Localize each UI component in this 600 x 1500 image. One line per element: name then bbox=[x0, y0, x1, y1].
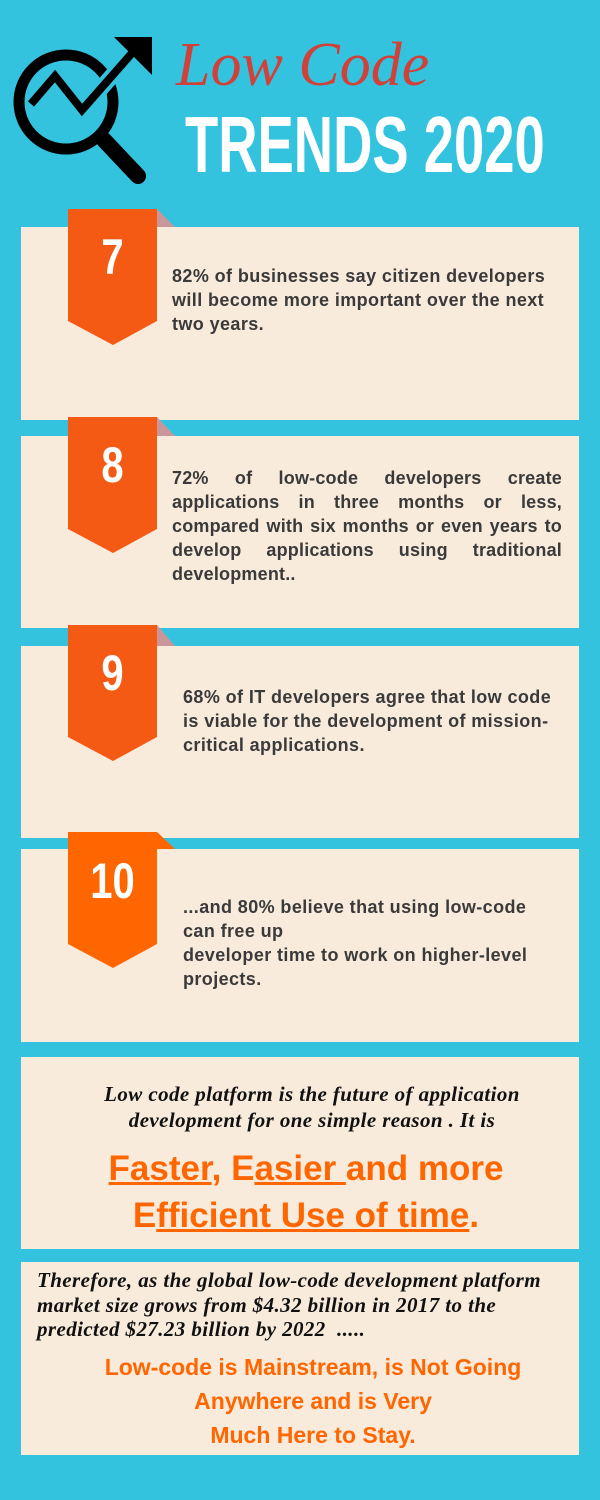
text 10: ...and 80% believe that using low-code bbox=[183, 897, 526, 917]
text 9 bbox=[183, 687, 551, 755]
ribbon 10 bbox=[68, 832, 175, 968]
text 8: applications in three months or less, bbox=[172, 492, 562, 512]
ribbon 9 bbox=[68, 625, 175, 761]
title: TRENDS 2020: TRENDS 2020 bbox=[185, 100, 545, 189]
panel: trend 7 bbox=[21, 227, 579, 420]
italic intro bbox=[104, 1082, 520, 1132]
title: Low Code: Low Code bbox=[176, 31, 429, 99]
text 10: developer time to work on higher-level bbox=[183, 945, 527, 965]
text 9: 68% of IT developers agree that low code bbox=[183, 687, 551, 707]
number 10: 10 bbox=[90, 853, 135, 909]
text 7: two years. bbox=[172, 314, 264, 334]
text 8: development.. bbox=[172, 564, 296, 584]
number 7: 7 bbox=[101, 229, 124, 285]
italic intro: Low code platform is the future of application bbox=[104, 1082, 520, 1106]
text 9: critical applications. bbox=[183, 735, 365, 755]
text 7 bbox=[172, 266, 545, 334]
orange conclusion: Much Here to Stay. bbox=[210, 1422, 416, 1448]
panel: trend 10 bbox=[21, 849, 579, 1042]
orange emphasis: Faster, Easier and more bbox=[109, 1149, 503, 1188]
number 8: 8 bbox=[101, 437, 124, 493]
italic market text: predicted $27.23 billion by 2022 ..... bbox=[37, 1317, 365, 1341]
orange conclusion: Low-code is Mainstream, is Not Going bbox=[105, 1354, 521, 1380]
italic market text: market size grows from $4.32 billion in 2017 to the bbox=[37, 1292, 496, 1316]
ribbon 8 bbox=[68, 417, 175, 553]
panel: trend 9 bbox=[21, 646, 579, 838]
ribbon 7 bbox=[68, 209, 175, 345]
text 7: 82% of businesses say citizen developers bbox=[172, 266, 545, 286]
italic market text: Therefore, as the global low-code development platform bbox=[37, 1268, 541, 1292]
icon: magnifier with trend arrow bbox=[14, 37, 152, 184]
text 7: will become more important over the next bbox=[172, 290, 544, 310]
italic intro: development for one simple reason . It is bbox=[129, 1108, 495, 1132]
text 9: is viable for the development of mission- bbox=[183, 711, 548, 731]
text 8 bbox=[172, 468, 562, 584]
orange emphasis: Efficient Use of time. bbox=[133, 1196, 479, 1235]
text 8: develop applications using traditional bbox=[172, 540, 562, 560]
text 10: projects. bbox=[183, 969, 262, 989]
orange emphasis bbox=[108, 1149, 503, 1235]
italic market text bbox=[36, 1268, 541, 1341]
text 10 bbox=[183, 897, 527, 989]
orange conclusion bbox=[105, 1354, 521, 1448]
number 9: 9 bbox=[101, 645, 124, 701]
panel: conclusion bbox=[21, 1057, 579, 1249]
text 8: compared with six months or even years to bbox=[172, 516, 562, 536]
panel: market bbox=[21, 1262, 579, 1455]
text 10: can free up bbox=[183, 921, 283, 941]
panel: trend 8 bbox=[21, 436, 579, 628]
text 8: 72% of low-code developers create bbox=[172, 468, 562, 488]
orange conclusion: Anywhere and is Very bbox=[194, 1388, 432, 1414]
